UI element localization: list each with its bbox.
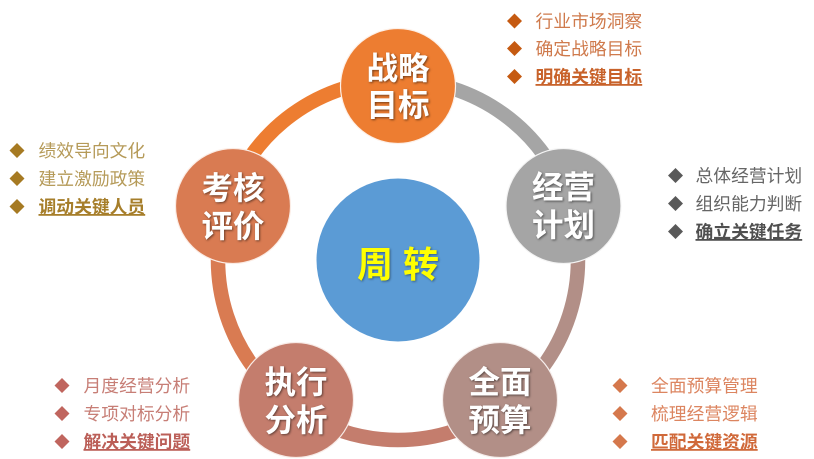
list: 考核评价 items [10, 141, 145, 217]
list: 战略目标 items: 行业市场洞察 [536, 12, 642, 32]
node: 考核评价: 评价 [201, 208, 265, 244]
node: 经营计划 [506, 148, 621, 264]
list: 全面预算 items: 匹配关键资源 [651, 432, 758, 452]
node: 执行分析: 执行 [264, 364, 328, 400]
ring: arc review to strategy [227, 80, 398, 204]
node: 执行分析 [238, 342, 354, 458]
node: 考核评价: 考核 [201, 170, 265, 206]
list: 经营计划 items [668, 166, 802, 242]
node: 考核评价 [176, 148, 290, 264]
ring: gray arc strategy to plan [398, 80, 569, 204]
ring: arc budget to analysis [292, 406, 504, 440]
center circle: 周转: 周 转 [357, 244, 439, 285]
list: 经营计划 items: 确立关键任务 [696, 221, 802, 242]
list: 战略目标 items [507, 12, 642, 87]
list: 全面预算 items: 全面预算管理 [651, 376, 758, 396]
list: 考核评价 items: 绩效导向文化 [38, 141, 145, 161]
node: 全面预算: 预算 [468, 402, 532, 438]
ring: arc analysis to review [218, 204, 292, 406]
list: 执行分析 items: 专项对标分析 [84, 404, 190, 424]
list: 经营计划 items: 总体经营计划 [696, 166, 802, 186]
list: 全面预算 items: 梳理经营逻辑 [651, 404, 758, 424]
list: 执行分析 items: 月度经营分析 [84, 376, 190, 396]
node: 战略目标 [340, 28, 456, 144]
list: 考核评价 items: 建立激励政策 [38, 169, 145, 189]
list: 执行分析 items [54, 376, 190, 452]
list: 执行分析 items: 解决关键问题 [84, 432, 190, 452]
node: 经营计划: 经营 [532, 169, 595, 205]
node: 战略目标: 战略 [366, 50, 430, 86]
node: 战略目标: 目标 [366, 87, 430, 123]
list: 全面预算 items [612, 376, 758, 452]
node: 经营计划: 计划 [532, 207, 595, 243]
node: 执行分析: 分析 [264, 402, 328, 438]
ring: arc plan to budget [504, 204, 578, 406]
center circle: 周转 [316, 178, 480, 342]
list: 经营计划 items: 组织能力判断 [696, 194, 802, 214]
list: 战略目标 items: 明确关键目标 [536, 67, 642, 87]
list: 战略目标 items: 确定战略目标 [536, 39, 642, 59]
list: 考核评价 items: 调动关键人员 [38, 197, 145, 217]
node: 全面预算: 全面 [468, 364, 532, 400]
node: 全面预算 [442, 342, 558, 458]
